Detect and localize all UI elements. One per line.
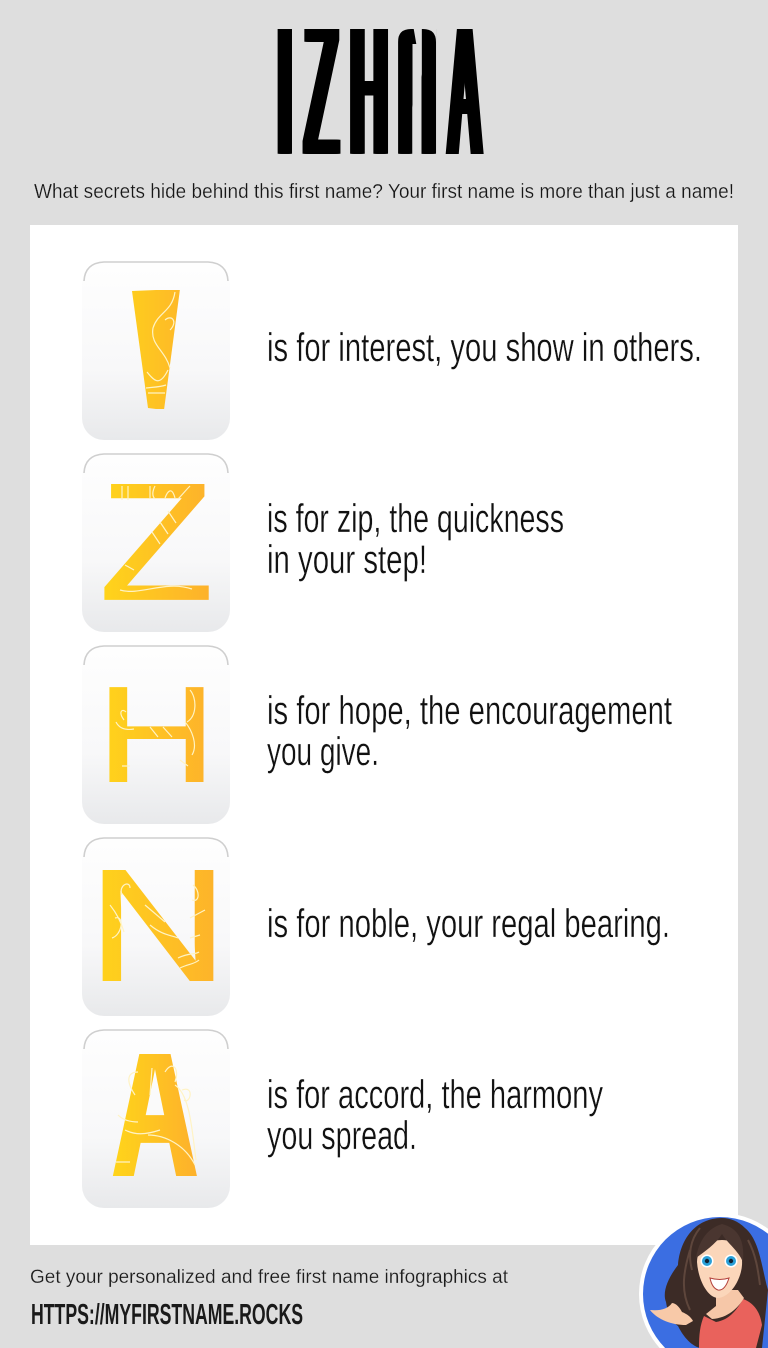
icon: letter I tile	[82, 253, 230, 446]
title	[278, 29, 484, 154]
icon: letter I tile: I	[110, 253, 202, 446]
icon: letter A tile: A	[112, 994, 198, 1218]
face	[697, 1240, 742, 1298]
row: letter N	[82, 837, 670, 1016]
icon: letter N tile: N	[88, 837, 228, 1014]
neck	[706, 1290, 744, 1319]
avatar	[639, 1213, 768, 1348]
hair highlights	[684, 1228, 760, 1310]
row: letter A	[82, 1029, 603, 1208]
text: A lines: is for accord, the harmony	[267, 1073, 603, 1117]
icon: letter A tile	[82, 1029, 230, 1208]
icon: letter H tile: H	[97, 659, 216, 810]
hand	[650, 1303, 693, 1325]
footer url: HTTPS://MYFIRSTNAME.ROCKS	[31, 1299, 303, 1331]
footer text: Get your personalized and free first name infographics at	[30, 1267, 509, 1288]
icon: letter H tile	[82, 646, 230, 824]
mouth	[710, 1278, 729, 1290]
text: Z lines: in your step!	[267, 538, 427, 582]
row: letter I	[82, 253, 702, 446]
shirt	[699, 1299, 762, 1348]
hair fringe	[696, 1224, 743, 1262]
text: H lines: you give.	[267, 730, 379, 774]
text: Z lines: is for zip, the quickness	[267, 497, 564, 541]
panel: white letters panel	[30, 225, 738, 1245]
row: letter H	[82, 646, 672, 824]
subtitle: What secrets hide behind this first name? Your first name is more than just a name!	[34, 181, 734, 203]
icon: letter Z tile: Z	[99, 450, 214, 635]
row: letter Z	[82, 450, 564, 635]
text: A lines: you spread.	[267, 1114, 417, 1158]
hair back	[665, 1218, 768, 1348]
eyes	[700, 1254, 714, 1268]
